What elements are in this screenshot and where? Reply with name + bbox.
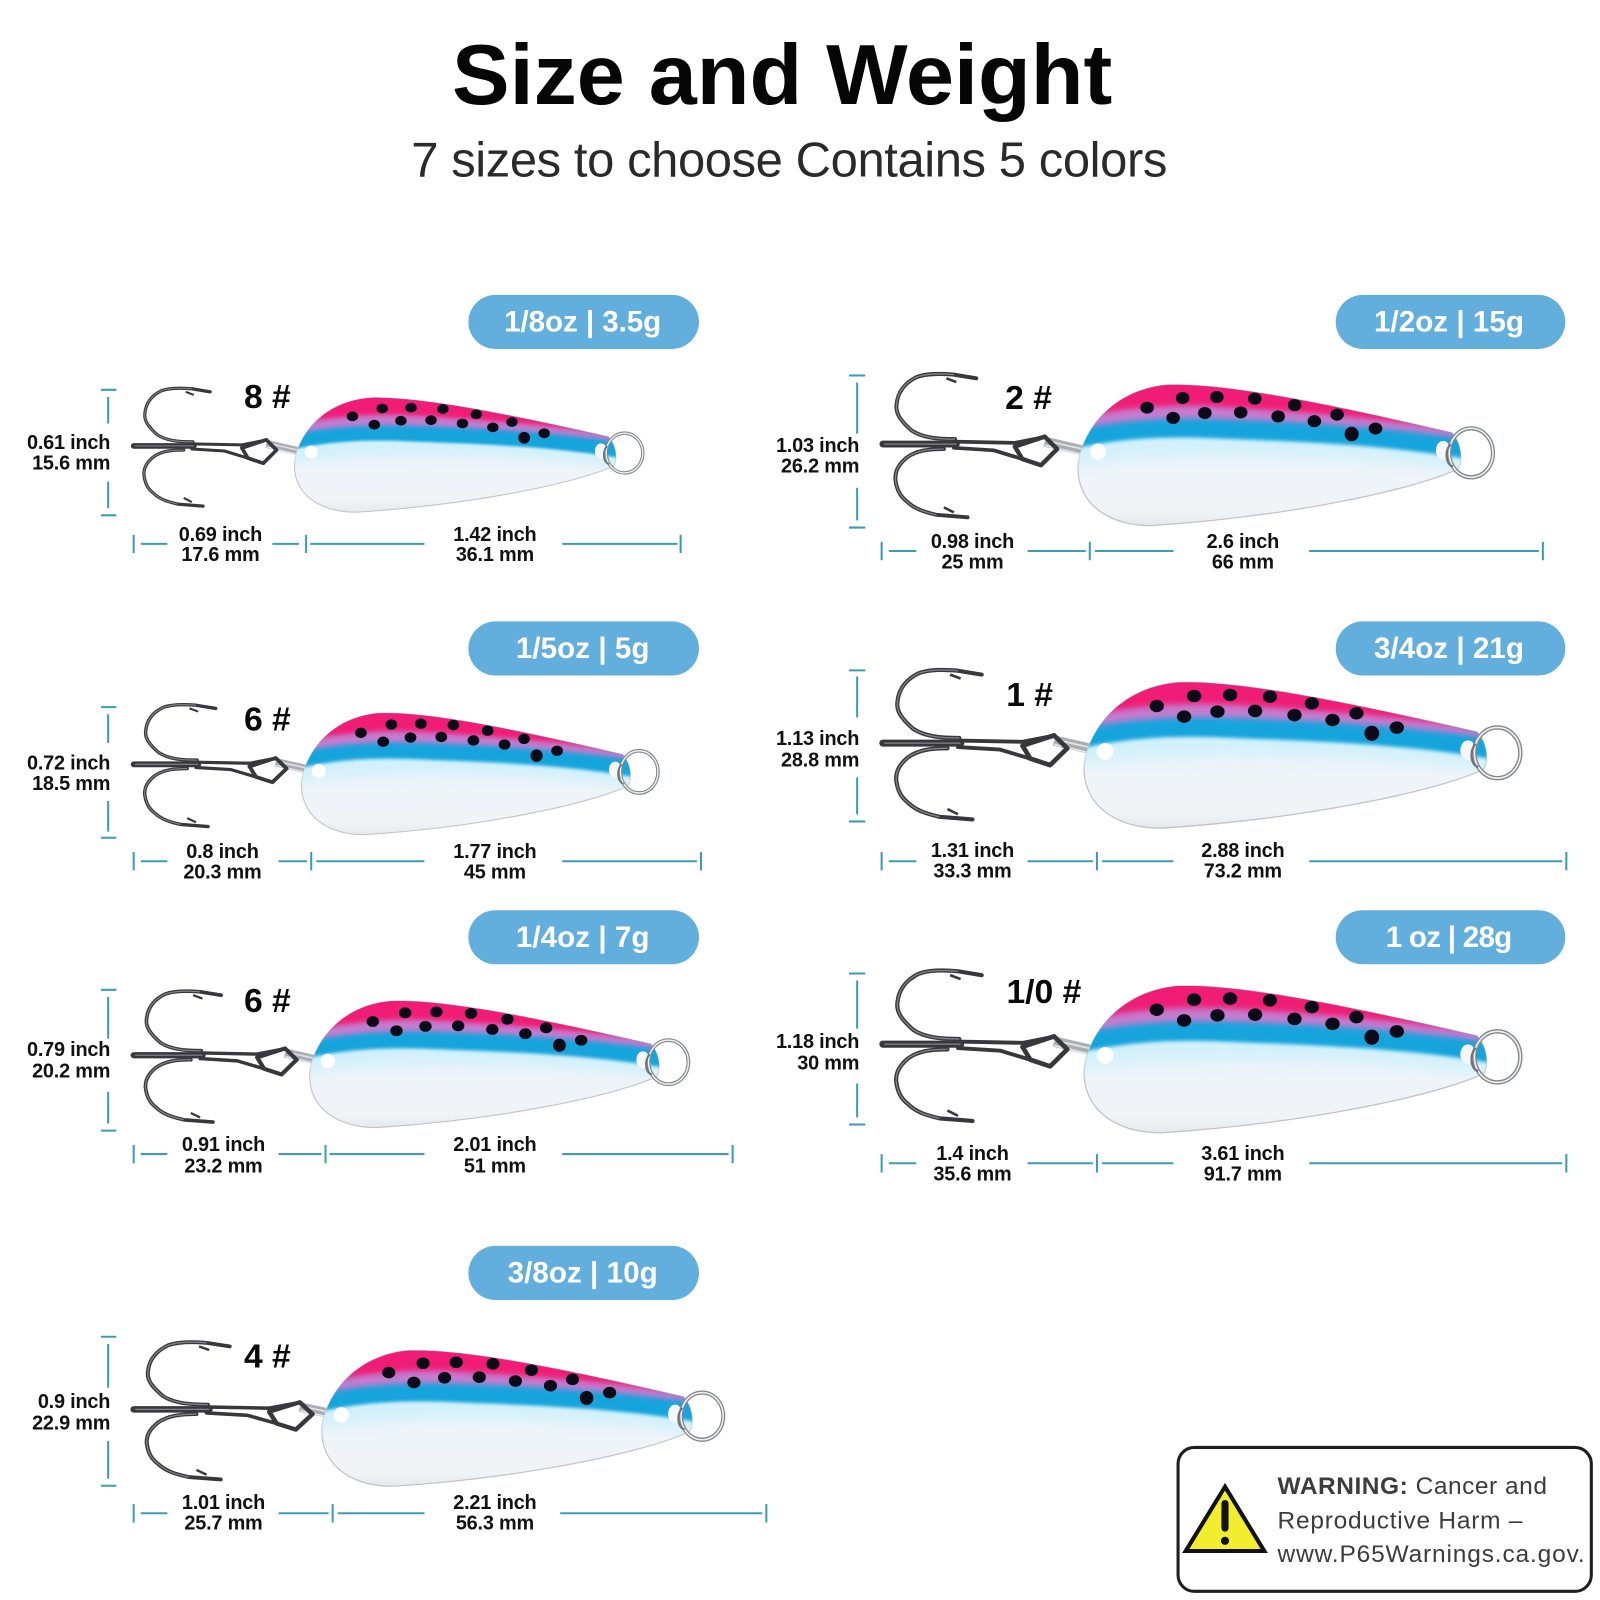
title: Size and Weight [452, 27, 1112, 123]
spoon length dimension: 45 mm [464, 862, 526, 884]
size label: 4 # [244, 1338, 291, 1375]
spoon [292, 708, 658, 835]
height dimension: 26.2 mm [781, 455, 859, 477]
height dimension [27, 707, 116, 838]
weight pill: 1/2oz | 15g [1374, 306, 1524, 339]
hook length dimension: 33.3 mm [933, 861, 1012, 883]
weight pill: 3/4oz | 21g [1374, 632, 1524, 665]
hook length dimension: 1.31 inch [931, 840, 1014, 862]
weight pill: 1/5oz | 5g [516, 632, 649, 665]
weight pill [468, 295, 699, 349]
spoon length dimension: 2.21 inch [453, 1492, 537, 1514]
hook length dimension: 0.91 inch [182, 1134, 265, 1156]
hook [134, 991, 330, 1122]
lure panel: 1/8oz 3.5g [27, 295, 699, 566]
weight pill [468, 1246, 699, 1300]
spoon length dimension: 56.3 mm [456, 1513, 534, 1535]
hook length dimension [882, 840, 1093, 883]
spoon length dimension [326, 1134, 733, 1177]
size label: 1 # [1006, 677, 1053, 714]
hook [883, 670, 1105, 819]
subtitle: 7 sizes to choose Contains 5 colors [411, 134, 1167, 188]
height dimension [776, 376, 865, 528]
weight pill [1336, 910, 1565, 964]
weight pill: 1 oz | 28g [1386, 921, 1512, 954]
spoon [1066, 379, 1493, 526]
spoon [311, 1345, 723, 1486]
lure panel: 3/8oz 10g [32, 1246, 766, 1535]
height dimension: 18.5 mm [32, 773, 110, 795]
weight pill: 3/8oz | 10g [508, 1257, 658, 1290]
spoon length dimension: 36.1 mm [456, 544, 534, 566]
hook length dimension: 23.2 mm [184, 1155, 263, 1177]
hook length dimension: 17.6 mm [181, 544, 259, 566]
hook length dimension: 25 mm [941, 551, 1003, 573]
weight pill [1336, 621, 1565, 676]
spoon length dimension [311, 841, 701, 884]
height dimension: 30 mm [797, 1052, 859, 1074]
height dimension: 20.2 mm [32, 1061, 110, 1083]
height dimension: 1.13 inch [776, 728, 859, 750]
warning text: WARNING: Cancer and [1278, 1473, 1547, 1500]
height dimension: 1.03 inch [776, 435, 859, 457]
height dimension: 15.6 mm [32, 452, 110, 474]
lure panel: 1/2oz 15g [776, 295, 1565, 573]
warning text: www.P65Warnings.ca.gov. [1277, 1541, 1585, 1568]
hook length dimension: 0.98 inch [931, 531, 1014, 553]
lure panel: 1 oz 28g [776, 910, 1566, 1186]
hook length dimension: 0.8 inch [186, 841, 259, 863]
hook [134, 1342, 349, 1479]
lure panel: 3/4oz 21g [776, 621, 1566, 883]
spoon length dimension: 1.77 inch [453, 841, 537, 863]
weight pill [468, 621, 699, 676]
spoon length dimension [1097, 840, 1566, 883]
lure panel: 1/4oz 7g [27, 910, 733, 1177]
height dimension [27, 990, 116, 1131]
hook length dimension: 0.69 inch [179, 524, 262, 546]
spoon length dimension [333, 1492, 766, 1535]
height dimension [776, 670, 865, 821]
spoon length dimension: 66 mm [1212, 551, 1274, 573]
hook length dimension: 25.7 mm [184, 1513, 263, 1535]
height dimension [776, 973, 865, 1124]
spoon [299, 996, 688, 1128]
height dimension [27, 390, 116, 515]
weight pill [1336, 295, 1565, 349]
hook length dimension [882, 1143, 1093, 1186]
hook [883, 374, 1093, 517]
icon: warning triangle [1186, 1487, 1264, 1551]
hook [883, 970, 1105, 1121]
hook length dimension [134, 841, 307, 884]
height dimension: 28.8 mm [781, 749, 859, 771]
warning text: Reproductive Harm – [1278, 1508, 1523, 1535]
hook length dimension: 35.6 mm [933, 1164, 1012, 1186]
spoon length dimension [1097, 1143, 1566, 1186]
hook length dimension: 1.01 inch [182, 1492, 265, 1514]
spoon length dimension: 73.2 mm [1204, 861, 1282, 883]
hook length dimension [134, 524, 299, 566]
height dimension [32, 1337, 116, 1486]
hook [134, 705, 318, 827]
hook length dimension: 1.4 inch [936, 1143, 1009, 1165]
size label: 1/0 # [1006, 974, 1082, 1011]
spoon length dimension [306, 524, 681, 566]
spoon length dimension [1090, 531, 1543, 573]
spoon length dimension: 91.7 mm [1204, 1164, 1282, 1186]
size label: 8 # [244, 379, 291, 416]
hook length dimension [882, 531, 1086, 573]
hook length dimension [134, 1134, 321, 1177]
spoon length dimension: 51 mm [464, 1155, 526, 1177]
size label: 6 # [244, 983, 291, 1020]
spoon length dimension: 3.61 inch [1201, 1143, 1284, 1165]
height dimension: 0.9 inch [38, 1391, 110, 1413]
spoon [1072, 676, 1520, 828]
weight pill: 1/8oz | 3.5g [504, 306, 661, 339]
size label: 6 # [244, 702, 291, 739]
spoon length dimension: 2.88 inch [1201, 840, 1284, 862]
lure panel: 1/5oz 5g [27, 621, 701, 884]
size label: 2 # [1005, 380, 1052, 417]
warning text [1277, 1473, 1585, 1568]
height dimension: 0.79 inch [27, 1039, 110, 1061]
hook length dimension [134, 1492, 329, 1535]
hook [134, 388, 306, 506]
warning box [1178, 1447, 1591, 1591]
hook length dimension: 20.3 mm [183, 862, 262, 884]
height dimension: 22.9 mm [32, 1413, 110, 1435]
spoon [285, 393, 643, 512]
height dimension: 0.61 inch [27, 432, 110, 454]
spoon length dimension: 1.42 inch [453, 524, 537, 546]
weight pill: 1/4oz | 7g [516, 921, 649, 954]
height dimension: 0.72 inch [27, 752, 110, 774]
height dimension: 1.18 inch [776, 1031, 859, 1053]
spoon length dimension: 2.6 inch [1207, 531, 1279, 553]
spoon [1072, 980, 1520, 1133]
weight pill [468, 910, 699, 964]
spoon length dimension: 2.01 inch [453, 1134, 537, 1156]
